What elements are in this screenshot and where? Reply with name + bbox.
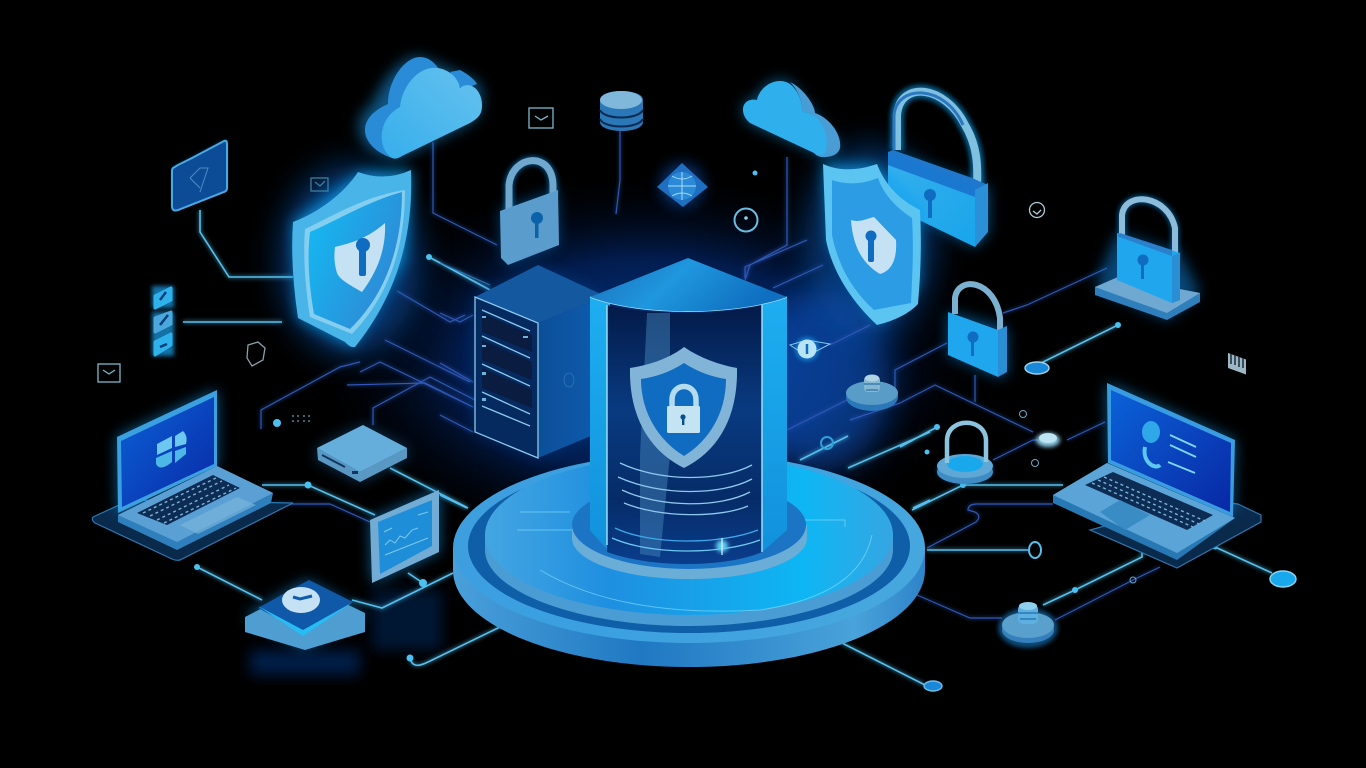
icon: cloud left <box>359 57 482 159</box>
cylinder side strips <box>590 297 610 552</box>
shield with lock <box>630 347 737 468</box>
screen contact icons <box>1142 421 1196 473</box>
roof <box>590 258 787 311</box>
padlock large <box>888 92 988 247</box>
server rack <box>475 265 605 458</box>
keyboard <box>1085 472 1213 530</box>
left laptop <box>92 390 293 560</box>
small pedestal stack <box>846 374 898 411</box>
padlock top left <box>500 161 559 265</box>
icon: globe <box>657 163 708 207</box>
right laptop <box>1053 383 1261 568</box>
small padlock on base <box>937 423 993 484</box>
keyhole shield <box>334 223 385 292</box>
central platform <box>453 258 925 667</box>
screen logo <box>156 431 187 468</box>
inner disc <box>485 455 893 626</box>
laptop screen <box>117 390 217 513</box>
secure box <box>245 580 365 650</box>
icon: folder <box>172 140 227 210</box>
shield left <box>292 170 412 347</box>
knob with keyhole <box>790 337 830 361</box>
keyboard <box>137 475 240 525</box>
glass lines <box>612 463 760 551</box>
laptop pad <box>1090 500 1261 568</box>
padlock mid right <box>948 284 1007 377</box>
shield right <box>823 163 921 325</box>
network lines <box>183 130 1272 685</box>
icon: ring <box>734 208 758 232</box>
lock glyph <box>667 386 700 433</box>
icon: cloud right <box>743 80 840 157</box>
icon: tiles <box>152 286 174 356</box>
monitor device <box>370 490 439 583</box>
pedestal <box>572 481 807 579</box>
pedestal stack bottom right <box>998 602 1058 648</box>
icon: database stack <box>600 91 643 131</box>
node dots <box>194 170 1218 662</box>
laptop pad <box>92 500 293 560</box>
outer plate <box>453 453 925 667</box>
central glow <box>250 145 990 675</box>
icon: smile <box>1030 202 1044 218</box>
dots grid <box>292 415 310 422</box>
glass stripe <box>640 313 670 557</box>
padlock far right <box>1095 199 1200 320</box>
icon: message outlines <box>98 108 553 382</box>
icon: bars <box>1228 353 1246 375</box>
small nodes <box>821 362 1296 691</box>
laptop screen <box>1107 383 1235 517</box>
flat device <box>317 425 407 482</box>
base plate <box>1095 277 1200 320</box>
keyhole shield <box>851 217 896 274</box>
spark <box>716 538 728 555</box>
cylinder <box>590 258 787 564</box>
